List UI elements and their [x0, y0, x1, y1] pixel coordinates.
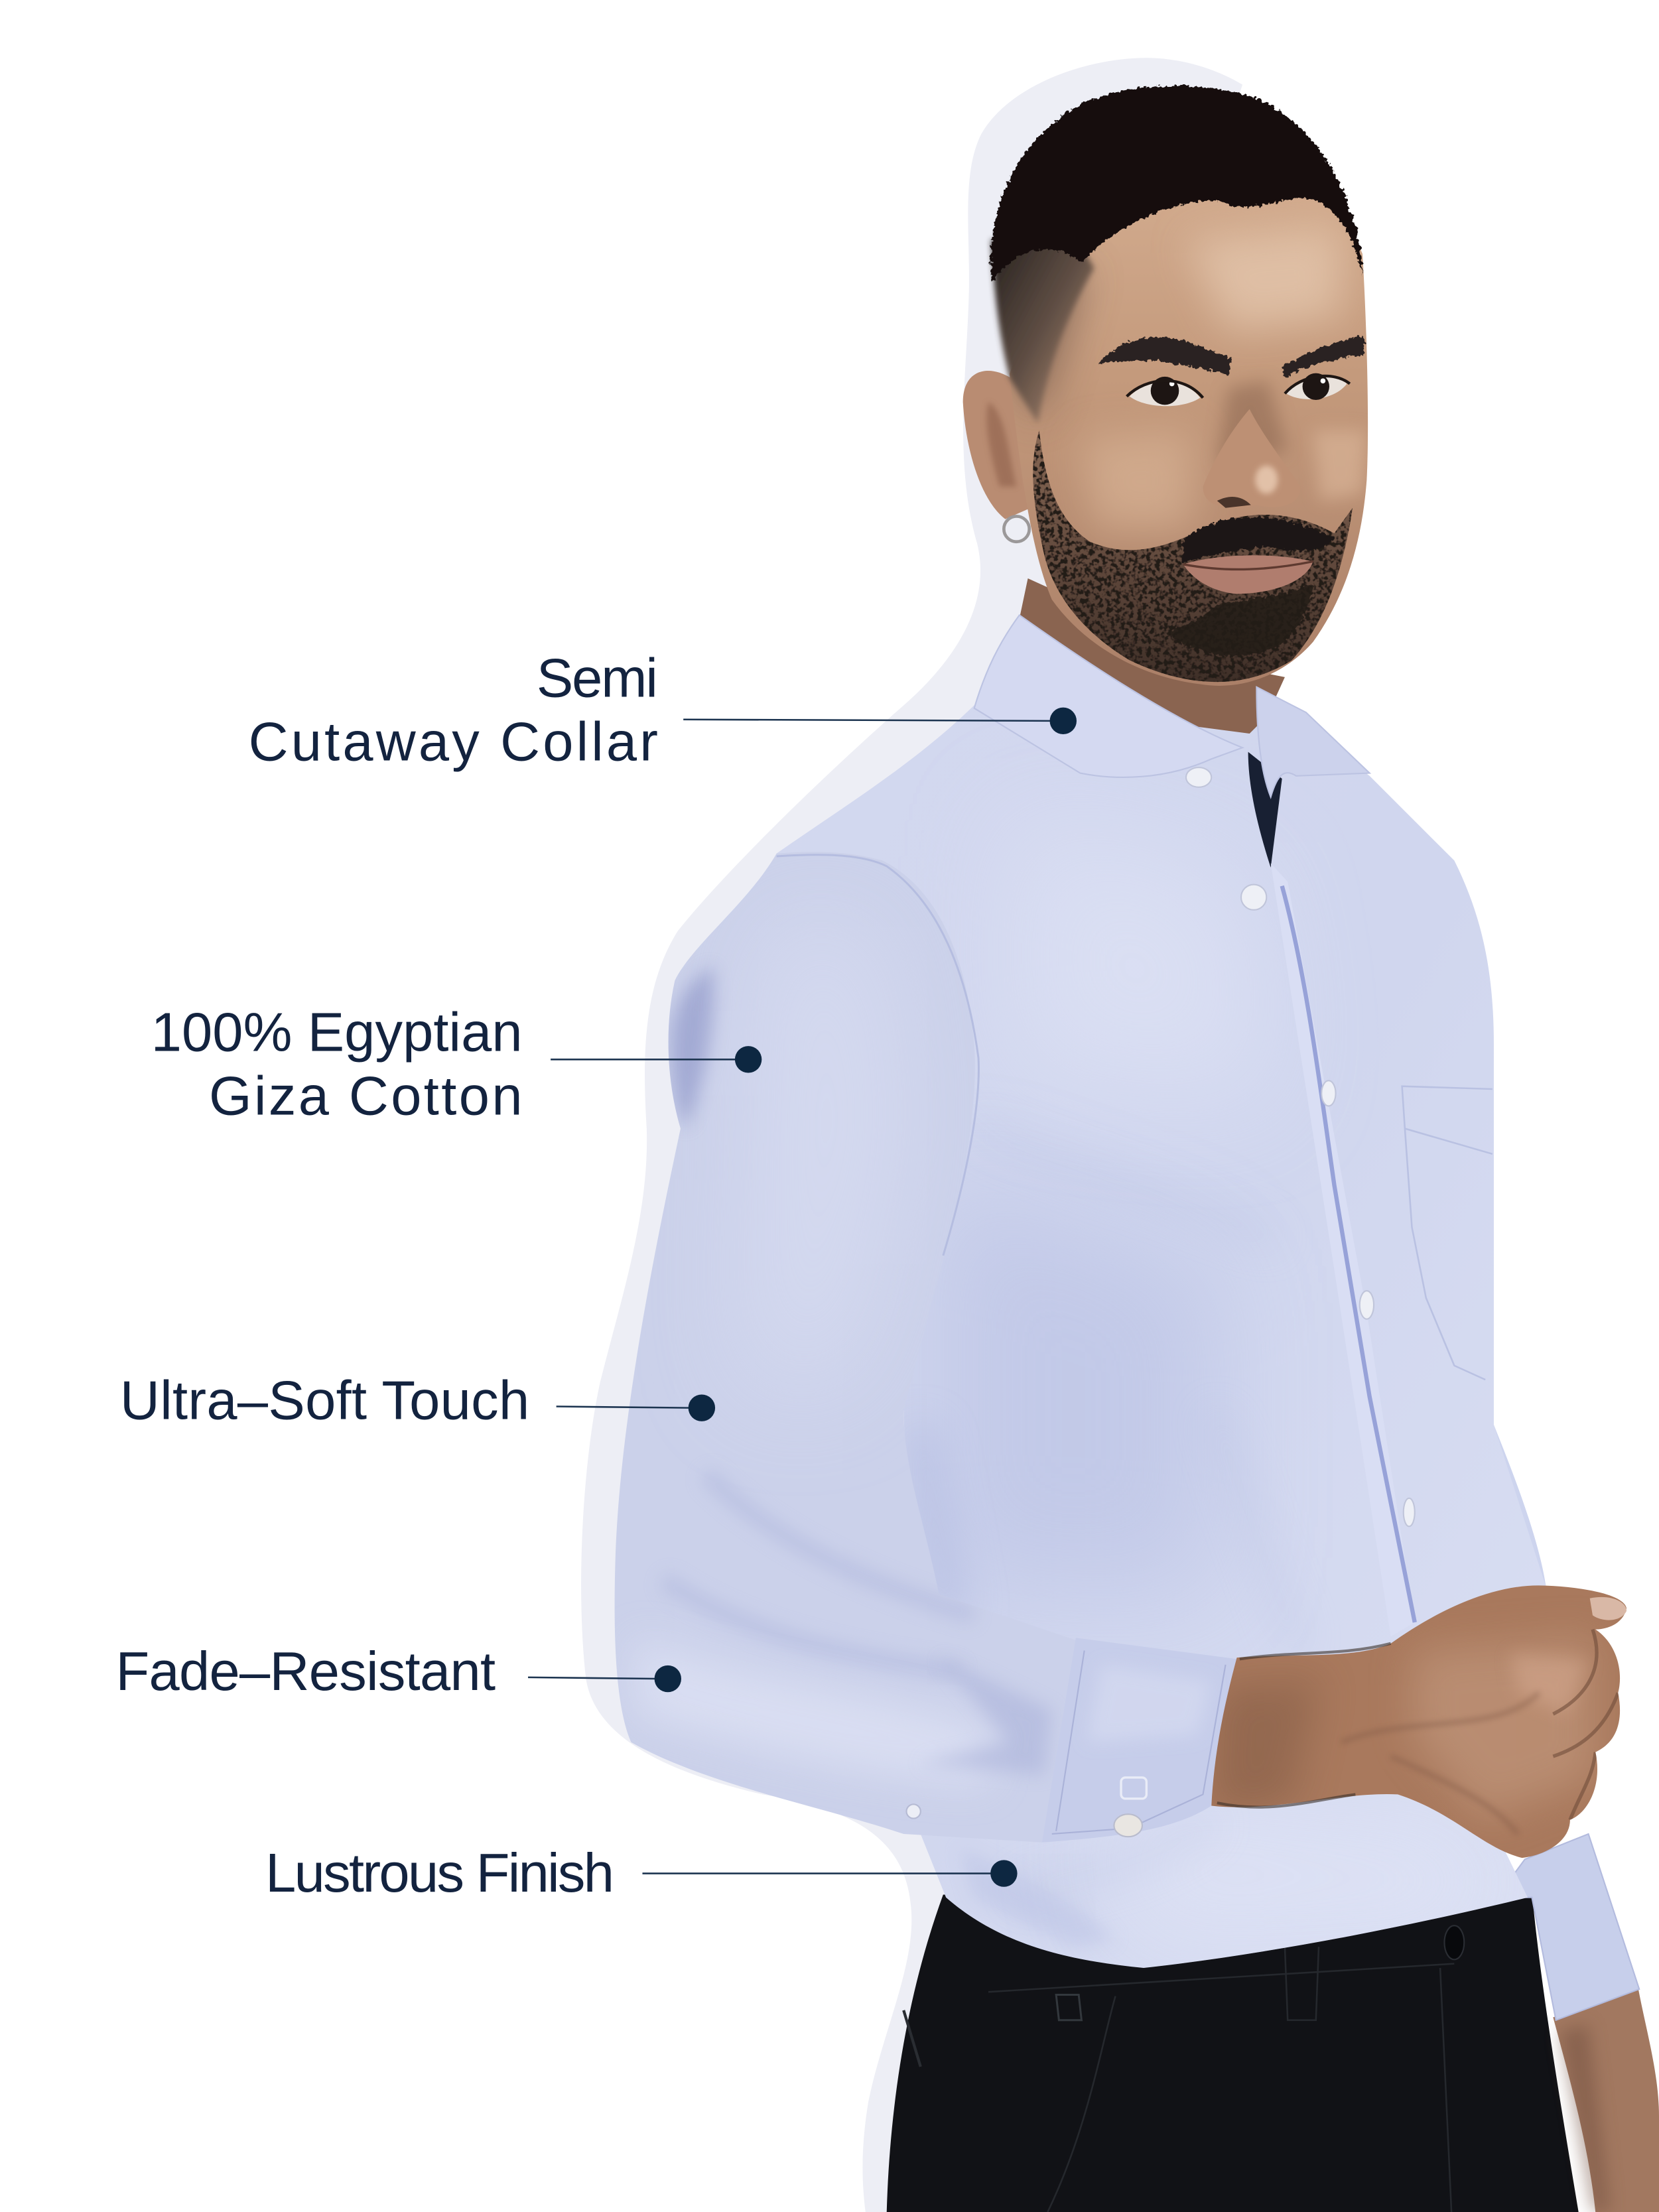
leader line	[551, 1059, 737, 1060]
marker dot	[990, 1860, 1018, 1887]
shirt buttons	[1186, 767, 1415, 1526]
leader line	[557, 1407, 691, 1408]
background halo silhouette	[581, 58, 1242, 2212]
placket	[1271, 864, 1415, 1636]
hair fade	[991, 233, 1095, 423]
label text: Semi	[537, 647, 658, 709]
far cuff	[1496, 1834, 1639, 2020]
label text: Lustrous Finish	[265, 1842, 614, 1904]
label text: Giza Cotton	[209, 1065, 523, 1126]
near sleeve	[615, 852, 1077, 1843]
label text: Cutaway Collar	[249, 710, 658, 772]
callout: ultra-soft touch	[120, 1370, 715, 1431]
far sleeve edge	[1494, 1425, 1546, 1594]
label text: Ultra–Soft Touch	[120, 1370, 529, 1431]
label text: 100% Egyptian	[151, 1002, 523, 1063]
callout: fade-resistant	[116, 1640, 681, 1702]
leader line	[683, 720, 1052, 721]
marker dot	[689, 1394, 715, 1421]
beard	[1033, 430, 1353, 682]
shirt neck opening	[1248, 752, 1282, 868]
model figure	[615, 86, 1659, 2212]
earring	[1004, 516, 1029, 542]
trousers	[887, 1890, 1579, 2212]
label text: Fade–Resistant	[116, 1640, 496, 1702]
callout: semi cutaway collar	[249, 647, 1077, 772]
callout: lustrous finish	[265, 1842, 1018, 1904]
marker dot	[1050, 708, 1077, 734]
eyebrows	[1098, 337, 1231, 375]
marker dot	[735, 1046, 762, 1073]
callout: egyptian cotton	[151, 1002, 762, 1126]
nose	[1203, 409, 1300, 507]
neck	[1017, 578, 1285, 755]
shirt torso	[777, 698, 1546, 1968]
hair	[991, 86, 1362, 282]
leader line	[528, 1677, 657, 1679]
leader line	[642, 1873, 992, 1874]
lips	[1183, 555, 1313, 594]
ear	[963, 371, 1031, 519]
face	[1010, 169, 1368, 698]
eyes	[1130, 382, 1200, 406]
pocket	[1402, 1086, 1493, 1380]
marker dot	[655, 1665, 681, 1692]
far forearm	[1553, 1986, 1659, 2212]
collar	[974, 615, 1370, 797]
sleeve cuff	[907, 1638, 1237, 1843]
hand and wrist	[1211, 1585, 1626, 1858]
